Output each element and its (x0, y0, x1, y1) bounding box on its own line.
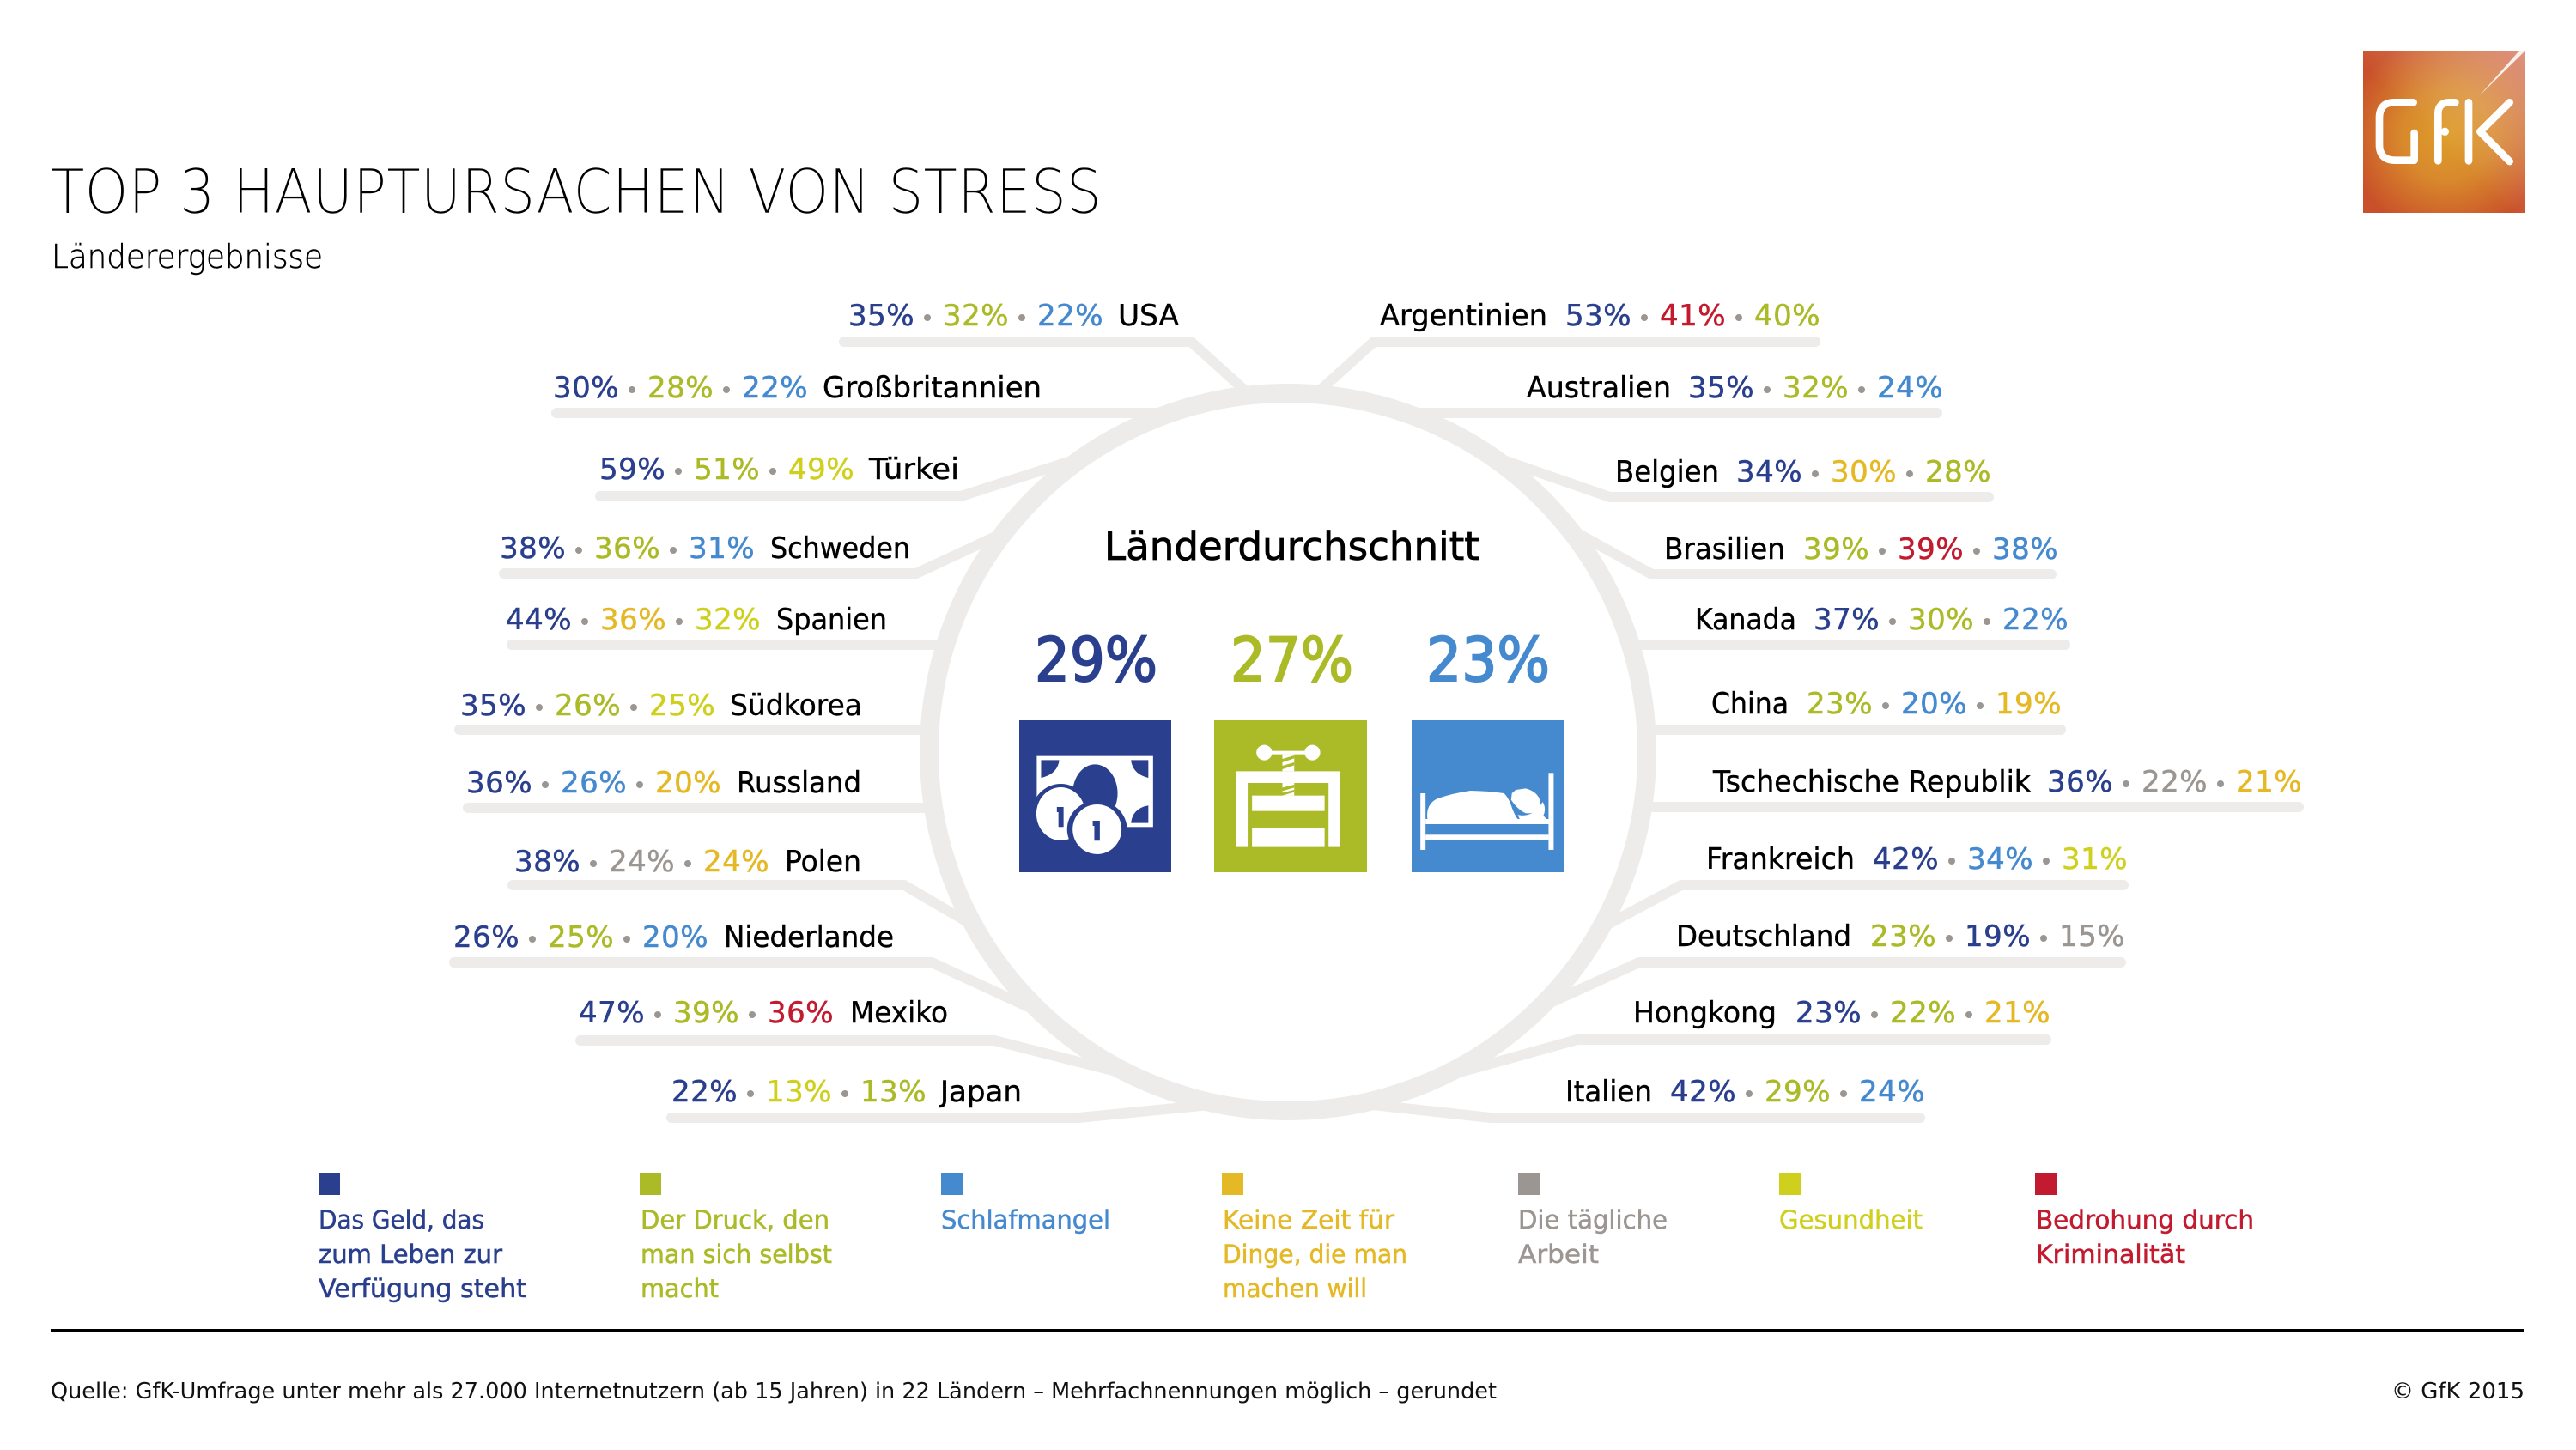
row: Japan: Japan (939, 1075, 1022, 1109)
row: Grossbritannien: 30% (553, 371, 619, 405)
row: Frankreich: 31% (2062, 842, 2128, 877)
stat: 23%: 23% (1426, 625, 1550, 695)
row: Mexiko: 36% (768, 996, 834, 1030)
row: Belgien: 28% (1925, 455, 1991, 489)
legend: Der Druck: macht (641, 1274, 719, 1303)
legend: Das Geld (319, 1173, 526, 1303)
legend: Die taegliche Arbeit: Die tägliche (1518, 1205, 1668, 1235)
row: Belgien: 34% (1736, 455, 1802, 489)
row: Kanada: Kanada (1695, 603, 1796, 637)
row: Schweden: Schweden (770, 531, 910, 566)
legend: Gesundheit (1779, 1173, 1923, 1235)
row: Polen: 38% (514, 845, 580, 879)
row: Polen: 24% (703, 845, 769, 879)
row: Hongkong: 22% (1890, 996, 1956, 1030)
row: Spanien: 36% (600, 603, 666, 637)
row: Tuerkei: 51% (694, 452, 760, 487)
row: Suedkorea (459, 689, 926, 730)
row: Brasilien: 39% (1898, 532, 1964, 567)
row: Tschechische Republik: 22% (2142, 765, 2208, 799)
legend: Bedrohung durch Kriminalitaet: Bedrohung durch (2036, 1205, 2254, 1235)
row: Frankreich: 34% (1967, 842, 2033, 877)
row: Grossbritannien (553, 371, 1159, 413)
row: Deutschland: Deutschland (1676, 919, 1851, 954)
row: Tuerkei: 59% (599, 452, 665, 487)
row: Australien: 24% (1877, 371, 1943, 405)
row: Niederlande: 25% (548, 920, 614, 955)
row: Belgien: 30% (1831, 455, 1897, 489)
legend: Keine Zeit: machen will (1223, 1274, 1367, 1303)
row: Niederlande: 26% (453, 920, 519, 955)
source note: Quelle: GfK-Umfrage unter mehr als 27.000 Internetnutzern (ab 15 Jahren) in 22 Ländern – Mehrfachnennungen möglich – gerundet (51, 1379, 1497, 1404)
icon: money (1019, 720, 1171, 872)
row: Suedkorea: Südkorea (730, 689, 862, 723)
row: Italien: 42% (1670, 1075, 1736, 1109)
row: Hongkong: 23% (1795, 996, 1862, 1030)
row: Russland: 36% (466, 766, 532, 800)
row: USA (844, 299, 1245, 391)
row: Japan (671, 1075, 1219, 1118)
row: Frankreich: Frankreich (1706, 842, 1855, 877)
row: China: China (1711, 687, 1789, 721)
row: Argentinien: 41% (1660, 299, 1726, 333)
ring (929, 393, 1647, 1111)
row: Tuerkei: 49% (788, 452, 854, 487)
row: Suedkorea: 26% (555, 689, 621, 723)
row: Japan: 13% (860, 1075, 927, 1109)
row: Tschechische Republik: 36% (2047, 765, 2113, 799)
row: Argentinien: 53% (1565, 299, 1631, 333)
row: Mexiko: 47% (579, 996, 645, 1030)
legend: Keine Zeit (1222, 1173, 1407, 1303)
row: Mexiko: 39% (673, 996, 739, 1030)
row: Spanien: 44% (506, 603, 572, 637)
row: Italien (1357, 1075, 1925, 1118)
legend: Der Druck (640, 1173, 832, 1303)
legend: Schlafmangel (941, 1173, 1110, 1235)
row: Italien: 24% (1859, 1075, 1925, 1109)
row: Tschechische Republik: 21% (2236, 765, 2302, 799)
row: Niederlande: Niederlande (724, 920, 894, 955)
row: Tuerkei (599, 452, 1082, 496)
row: USA: 35% (848, 299, 914, 333)
row: Kanada: 30% (1908, 603, 1974, 637)
row: Tuerkei: Türkei (868, 452, 959, 487)
row: Hongkong (1460, 996, 2050, 1072)
row: Argentinien: Argentinien (1380, 299, 1547, 333)
row: China: 19% (1996, 687, 2062, 721)
row: Tschechische Republik (1649, 765, 2302, 807)
row: Australien: 35% (1688, 371, 1754, 405)
legend: Gesundheit: Gesundheit (1779, 1205, 1923, 1235)
row: Spanien (506, 603, 940, 645)
legend: Die taegliche Arbeit: Arbeit (1518, 1240, 1599, 1269)
row: Brasilien: 39% (1803, 532, 1869, 567)
row: Deutschland: 23% (1870, 919, 1936, 954)
row: Russland: Russland (737, 766, 861, 800)
row: Russland (466, 766, 927, 808)
row: Schweden (500, 531, 1005, 573)
row: Niederlande: 20% (642, 920, 708, 955)
row: China (1650, 687, 2062, 730)
row: Spanien: 32% (695, 603, 761, 637)
row: Polen (513, 845, 970, 924)
row: Mexiko (579, 996, 1116, 1071)
icon: bed (1412, 720, 1564, 872)
row: Spanien: Spanien (776, 603, 887, 637)
row: Hongkong: Hongkong (1633, 996, 1777, 1030)
subtitle: Länderergebnisse (52, 238, 323, 276)
legend: Der Druck: Der Druck, den (641, 1205, 829, 1235)
heading: Laenderdurchschnitt: Länderdurchschnitt (1104, 524, 1479, 569)
legend: Bedrohung durch Kriminalitaet: Kriminalität (2036, 1240, 2185, 1269)
row: Grossbritannien: Großbritannien (823, 371, 1042, 405)
row: Suedkorea: 35% (460, 689, 526, 723)
row: China: 23% (1807, 687, 1873, 721)
legend: Die taegliche Arbeit (1518, 1173, 1668, 1269)
row: Grossbritannien: 22% (742, 371, 808, 405)
row: Australien: 32% (1783, 371, 1849, 405)
row: USA: USA (1118, 299, 1179, 333)
row: Frankreich (1606, 842, 2128, 925)
row: Japan: 13% (766, 1075, 832, 1109)
row: Italien: Italien (1565, 1075, 1652, 1109)
row: USA: 32% (943, 299, 1009, 333)
row: Polen: Polen (785, 845, 861, 879)
row: Australien (1417, 371, 1943, 413)
row: Hongkong: 21% (1984, 996, 2050, 1030)
row: Niederlande (453, 920, 1030, 1008)
row: Polen: 24% (609, 845, 675, 879)
stat: 29%: 29% (1035, 625, 1157, 695)
legend: Keine Zeit: Keine Zeit für (1223, 1205, 1394, 1235)
row: Brasilien: 38% (1992, 532, 2058, 567)
row: Belgien (1498, 455, 1991, 497)
row: Japan: 22% (671, 1075, 738, 1109)
row: Frankreich: 42% (1873, 842, 1939, 877)
row: Kanada: 37% (1814, 603, 1880, 637)
row: Brasilien: Brasilien (1664, 532, 1785, 567)
legend: Das Geld: Verfügung steht (319, 1274, 526, 1303)
row: China: 20% (1901, 687, 1967, 721)
row: Schweden: 38% (500, 531, 566, 566)
legend: Bedrohung durch Kriminalitaet (2035, 1173, 2254, 1269)
icon: press (1214, 720, 1367, 872)
row: Grossbritannien: 28% (647, 371, 714, 405)
row: Kanada: 22% (2002, 603, 2069, 637)
row: Schweden: 36% (594, 531, 660, 566)
row: Schweden: 31% (689, 531, 755, 566)
logo: GfK (2363, 51, 2525, 213)
row: Tschechische Republik: Tschechische Republik (1712, 765, 2031, 799)
legend: Schlafmangel: Schlafmangel (941, 1205, 1110, 1235)
row: Mexiko: Mexiko (850, 996, 948, 1030)
legend: Das Geld: Das Geld, das (319, 1205, 484, 1235)
legend: Der Druck: man sich selbst (641, 1240, 832, 1269)
row: USA: 22% (1037, 299, 1103, 333)
row: Brasilien (1576, 532, 2058, 574)
row: Russland: 26% (561, 766, 627, 800)
row: Suedkorea: 25% (649, 689, 715, 723)
row: Kanada (1636, 603, 2069, 645)
legend: Das Geld: zum Leben zur (319, 1240, 502, 1269)
row: Deutschland: 15% (2059, 919, 2125, 954)
copyright: © GfK 2015 (2391, 1379, 2524, 1404)
row: Italien: 29% (1765, 1075, 1831, 1109)
legend: Keine Zeit: Dinge, die man (1223, 1240, 1407, 1269)
row: Russland: 20% (655, 766, 721, 800)
row: Belgien: Belgien (1615, 455, 1719, 489)
row: Deutschland: 19% (1965, 919, 2031, 954)
row: Argentinien: 40% (1754, 299, 1820, 333)
row: Australien: Australien (1527, 371, 1671, 405)
row: Argentinien (1320, 299, 1820, 391)
title: TOP 3 HAUPTURSACHEN VON STRESS (51, 156, 1102, 228)
row: Deutschland (1537, 919, 2125, 1009)
stat: 27%: 27% (1230, 625, 1353, 695)
